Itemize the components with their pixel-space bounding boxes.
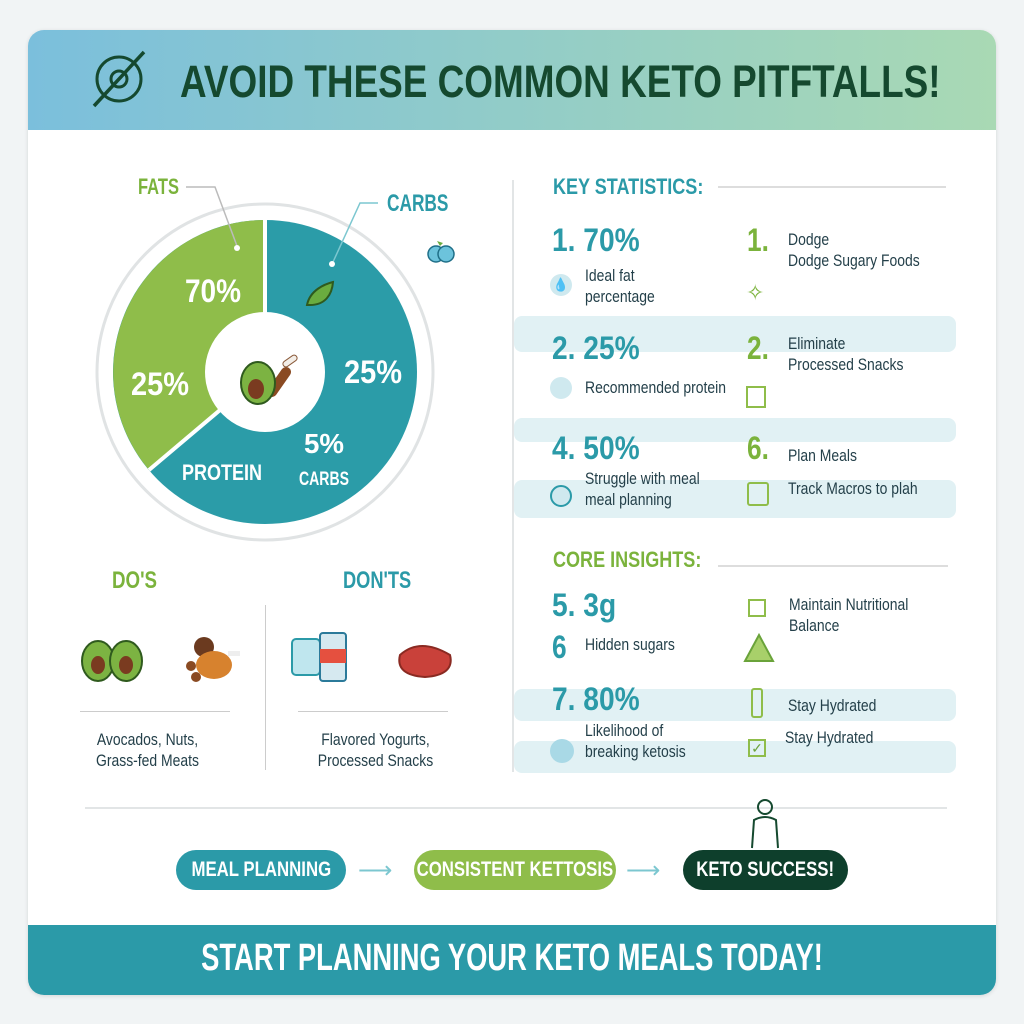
key statistics: 2. (747, 330, 769, 366)
key statistics: Ideal fat (585, 266, 635, 285)
key statistics: Plan Meals (788, 446, 857, 465)
donts: Flavored Yogurts, (321, 730, 430, 749)
pie chart: 5% (304, 428, 344, 459)
footer (28, 925, 996, 995)
stat 1: 1. 70% (552, 222, 640, 258)
dos: Grass-fed Meats (96, 751, 199, 770)
flow: pill consistent ketosis: CONSISTENT KETTOSIS (417, 858, 613, 881)
key statistics: Struggle with meal (585, 469, 700, 488)
core insights: breaking ketosis (585, 742, 686, 761)
core insights: Balance (789, 616, 839, 635)
flow: pill consistent ketosis (414, 850, 616, 890)
pie chart: 25% (344, 354, 402, 390)
dos: DO'S (112, 567, 157, 594)
core insights: Maintain Nutritional (789, 595, 908, 614)
stat 3: 4. 50% (552, 430, 640, 466)
core insights: 7. 80% (552, 681, 640, 717)
flow: pill keto success (683, 850, 848, 890)
dos (80, 567, 240, 770)
flow: pill meal planning (176, 850, 346, 890)
donts (291, 567, 452, 770)
core insights: ✓ (751, 740, 763, 756)
key statistics: Processed Snacks (788, 355, 903, 374)
core insights (550, 547, 948, 763)
label: carbs: CARBS (387, 190, 448, 217)
key statistics (550, 174, 946, 509)
core insights: 5. 3g (552, 587, 616, 623)
icon: avocados (81, 637, 240, 682)
key statistics: Eliminate (788, 334, 845, 353)
key statistics: percentage (585, 287, 655, 306)
key statistics: Dodge Sugary Foods (788, 251, 920, 270)
icon: person (751, 799, 779, 848)
dos: Avocados, Nuts, (97, 730, 198, 749)
donts: Processed Snacks (318, 751, 433, 770)
icon: leaf (307, 282, 333, 305)
flow: pill meal planning: MEAL PLANNING (191, 858, 331, 881)
stat 2: 2. 25% (552, 330, 640, 366)
pie chart: CARBS (299, 469, 349, 490)
key statistics: 6. (747, 430, 769, 466)
core insights: Stay Hydrated (788, 696, 876, 715)
key statistics: ✧ (746, 280, 764, 305)
key statistics: 1. (747, 222, 769, 258)
pie chart: 70% (185, 273, 241, 309)
core insights: Stay Hydrated (785, 728, 873, 747)
core insights: CORE INSIGHTS: (553, 547, 701, 572)
key statistics: meal planning (585, 490, 672, 509)
pie chart: 25% (131, 366, 189, 402)
title: AVOID THESE COMMON KETO PITFTALLS! (180, 56, 941, 107)
core insights: 6 (552, 629, 567, 665)
arrow: ⟶ (626, 857, 660, 884)
key statistics: Recommended protein (585, 378, 726, 397)
key statistics: 💧 (553, 277, 569, 292)
label: fats: FATS (138, 174, 179, 199)
bands (514, 316, 956, 352)
icon: blueberries (427, 241, 455, 263)
key statistics: Track Macros to plah (788, 479, 918, 498)
flow: pill keto success: KETO SUCCESS! (697, 858, 834, 881)
pie chart: PROTEIN (182, 460, 262, 485)
core insights: Hidden sugars (585, 635, 675, 654)
arrow: ⟶ (358, 857, 392, 884)
footer: START PLANNING YOUR KETO MEALS TODAY! (201, 937, 823, 979)
icon: avocado (241, 354, 298, 404)
core insights: Likelihood of (585, 721, 663, 740)
key statistics: KEY STATISTICS: (553, 174, 703, 199)
header (28, 30, 996, 130)
pie chart (96, 186, 434, 542)
donts: DON'TS (343, 567, 411, 594)
key statistics: Dodge (788, 230, 829, 249)
icon: yogurt and soda (291, 632, 452, 682)
icon: crossed donut (92, 50, 146, 108)
